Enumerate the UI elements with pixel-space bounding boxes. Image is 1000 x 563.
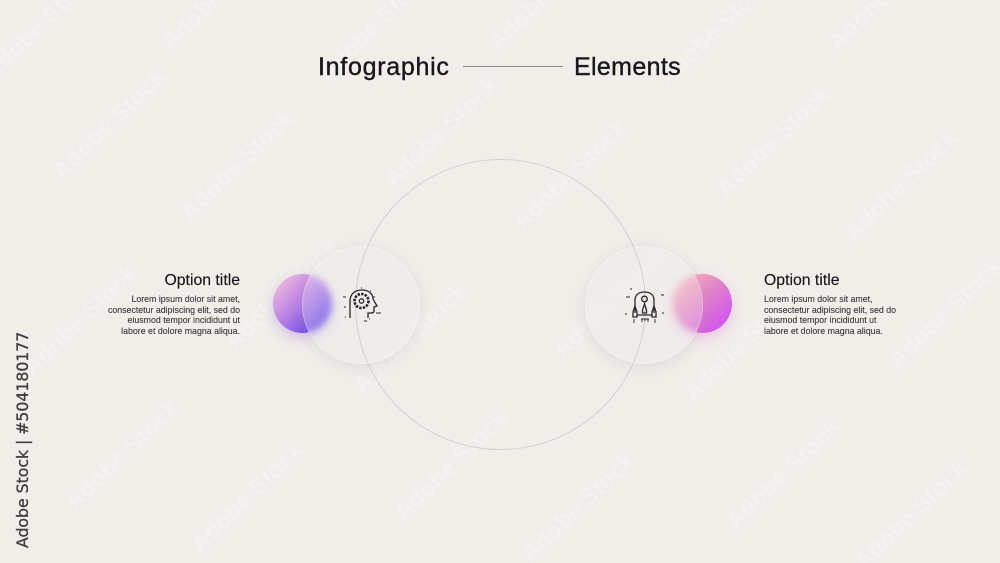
watermark pattern: Adobe Stock: [839, 124, 964, 246]
icon: rocket: [625, 288, 664, 323]
sphere: right pink: [673, 274, 732, 333]
watermark pattern: Adobe Stock: [389, 404, 514, 526]
stock id side label: Adobe Stock | #504180177: [13, 332, 32, 548]
watermark pattern: Adobe Stock: [47, 63, 172, 185]
left option body: [108, 294, 240, 336]
right option body: Lorem ipsum dolor sit amet,: [764, 294, 873, 304]
right option body: [764, 294, 896, 336]
right option body: eiusmod tempor incididunt ut: [764, 315, 876, 325]
watermark pattern: Adobe Stock: [721, 413, 846, 535]
watermark pattern: Adobe Stock: [175, 104, 300, 226]
left option body: eiusmod tempor incididunt ut: [128, 315, 240, 325]
watermark pattern: Adobe Stock: [678, 284, 803, 406]
left option text: [108, 272, 240, 336]
title: Elements: Elements: [574, 53, 681, 81]
watermark pattern: Adobe Stock: [508, 114, 633, 236]
right option body: consectetur adipiscing elit, sed do: [764, 305, 896, 315]
watermark pattern: Adobe Stock: [220, 234, 345, 356]
right option text: [764, 272, 896, 336]
sphere: left violet: [273, 274, 332, 333]
watermark pattern: Adobe Stock: [379, 71, 504, 193]
glass circle: right: [585, 246, 703, 364]
left option title: Option title: [164, 272, 240, 289]
title: Infographic: Infographic: [318, 53, 450, 81]
glass circle: left: [302, 246, 420, 364]
watermark pattern: Adobe Stock: [185, 436, 310, 558]
watermark pattern: Adobe Stock: [548, 242, 673, 364]
left option body: labore et dolore magna aliqua.: [121, 326, 240, 336]
left option body: Lorem ipsum dolor sit amet,: [131, 294, 240, 304]
watermark pattern: Adobe Stock: [348, 277, 473, 399]
icon: head with gear: [343, 288, 381, 322]
watermark pattern: Adobe Stock: [711, 80, 836, 202]
watermark pattern: Adobe Stock: [18, 259, 143, 381]
left option body: consectetur adipiscing elit, sed do: [108, 305, 240, 315]
watermark pattern: Adobe Stock: [60, 394, 185, 516]
title divider line: [463, 66, 563, 67]
right option body: labore et dolore magna aliqua.: [764, 326, 883, 336]
central ring: [355, 159, 646, 450]
right option title: Option title: [764, 272, 840, 289]
